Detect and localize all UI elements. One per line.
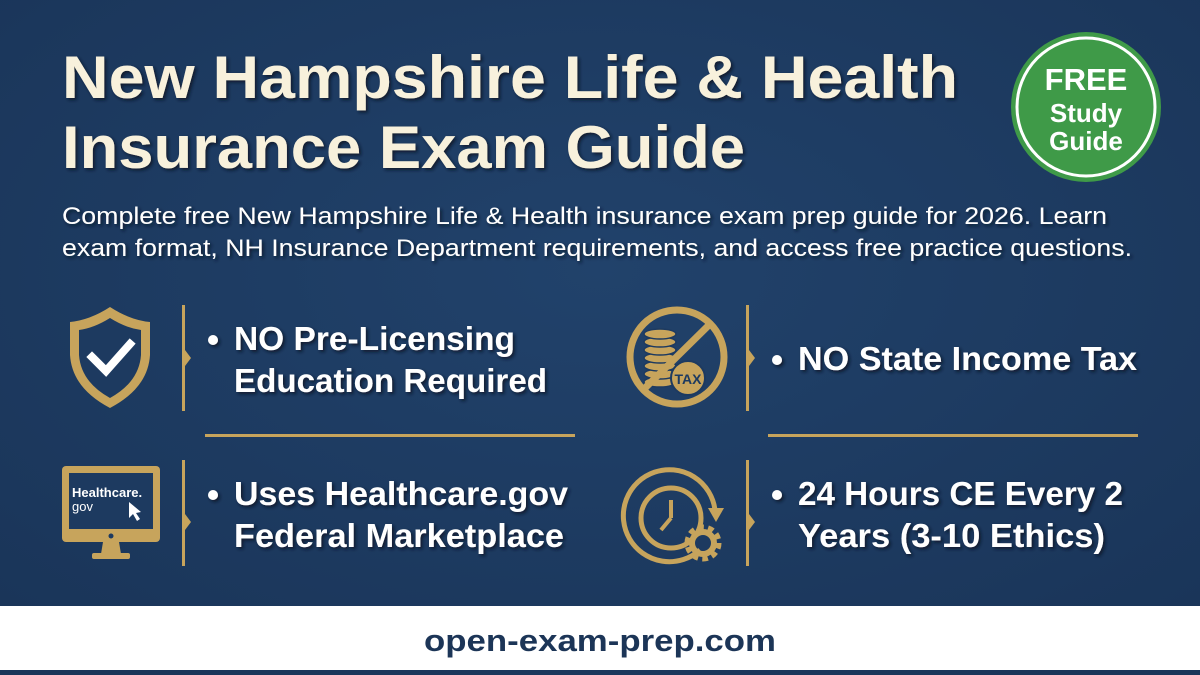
title: [62, 44, 958, 181]
item: 24 hours ce: Years (3-10 Ethics): [798, 517, 1105, 554]
item: 24 hours ce: 24 Hours CE Every 2: [798, 475, 1123, 512]
subtitle: [62, 203, 1132, 262]
subtitle: exam format, NH Insurance Department requirements, and access free practice questions.: [62, 235, 1132, 262]
badge: free study guide: [1011, 32, 1161, 182]
item: healthcare.gov: Uses Healthcare.gov: [234, 475, 569, 512]
item: healthcare.gov: Federal Marketplace: [234, 517, 564, 554]
badge: free study guide: Guide: [1049, 126, 1123, 156]
icon: shield check: [70, 307, 150, 408]
item: no pre-licensing: Education Required: [234, 362, 547, 399]
icon: clock and gear: [623, 470, 724, 562]
item: 24 hours ce: [772, 475, 1123, 554]
icon: healthcare monitor: gov: [72, 499, 93, 514]
icon: healthcare monitor: Healthcare.: [72, 485, 142, 500]
icon: no tax: [630, 310, 724, 404]
icon: no tax: TAX: [675, 371, 702, 387]
footer band: open-exam-prep.com: [424, 623, 776, 658]
item: no pre-licensing: NO Pre-Licensing: [234, 320, 515, 357]
badge: free study guide: FREE: [1045, 62, 1127, 97]
title: Insurance Exam Guide: [62, 114, 745, 181]
icon: healthcare monitor: [62, 466, 160, 559]
divider connectors left: [182, 305, 1138, 566]
subtitle: Complete free New Hampshire Life & Health insurance exam prep guide for 2026. Learn: [62, 203, 1107, 230]
badge: free study guide: Study: [1050, 98, 1123, 128]
item: healthcare.gov: [208, 475, 569, 554]
item: no pre-licensing: [208, 320, 547, 399]
footer band: [0, 606, 1200, 670]
title: New Hampshire Life & Health: [62, 44, 958, 111]
item: no state income tax: NO State Income Tax: [798, 340, 1138, 377]
